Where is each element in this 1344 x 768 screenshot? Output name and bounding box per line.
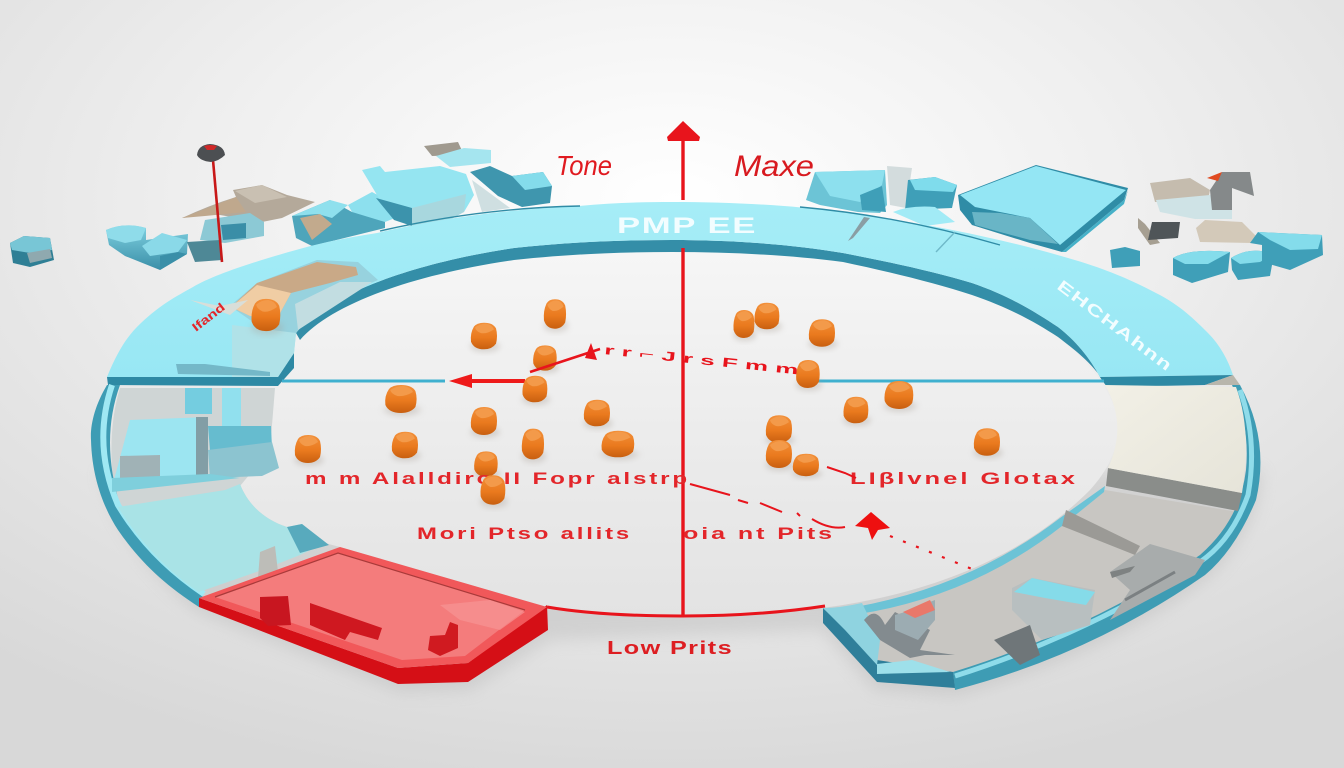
pin marker — [197, 144, 225, 262]
grey machine — [1138, 172, 1254, 245]
teal machine: centre-left — [292, 192, 410, 246]
red arrow pointing left — [449, 374, 525, 388]
panel inner inset — [215, 553, 525, 660]
interior grey — [111, 388, 275, 510]
vertical red axis with arrow — [667, 121, 700, 616]
label: bottom: Low Prits — [607, 638, 733, 658]
small dark block — [1148, 222, 1180, 240]
inner floor — [240, 252, 1118, 616]
label: Maxe: Maxe — [734, 150, 814, 183]
machine: left grey — [864, 612, 955, 658]
tan stone — [1196, 220, 1256, 243]
grey floor — [823, 490, 1238, 672]
red bottom line — [547, 606, 825, 616]
ring shadow — [100, 470, 1262, 696]
block: teal cube — [905, 177, 957, 210]
panel top surface — [199, 547, 547, 668]
red block right — [428, 622, 458, 656]
orange items — [251, 299, 1003, 479]
left lower ring — [91, 385, 329, 607]
step block — [287, 524, 329, 553]
outer rim — [91, 385, 204, 607]
blue horizontal axis right — [818, 380, 1104, 382]
band top rim — [380, 206, 1000, 245]
band front edge right — [1100, 375, 1233, 387]
cream panel: side — [1106, 468, 1242, 511]
corner foot — [823, 608, 955, 688]
block: large teal slab — [958, 165, 1128, 252]
red block left — [260, 596, 291, 626]
top ring band — [107, 202, 1240, 387]
teal strip above band — [893, 207, 955, 226]
red panel — [199, 547, 548, 684]
label: Tone: Tone — [556, 150, 612, 181]
cream panel: top — [1105, 385, 1246, 493]
band front edge left — [107, 353, 294, 386]
panel side wall — [199, 598, 548, 684]
band cut marks — [848, 217, 870, 241]
tan machine — [182, 185, 315, 222]
band side wall — [296, 240, 1107, 387]
block: teal left — [806, 166, 912, 213]
embedded tan module on band — [176, 260, 378, 377]
block: teal pair — [106, 225, 188, 270]
small teal cube — [1110, 247, 1140, 268]
dashed trend line upper — [690, 484, 845, 528]
block: far left cube — [10, 236, 54, 267]
small connector near right label — [827, 467, 856, 478]
outer rim wall — [953, 385, 1260, 690]
orange item over label — [480, 475, 508, 508]
label: right centre: LIβlvnel Glotax — [850, 469, 1078, 488]
inner teal rim — [823, 486, 1105, 618]
teal machine: large top — [362, 142, 491, 226]
building: tower — [185, 388, 212, 414]
label: lower left: Mori Ptso allits — [417, 524, 632, 543]
band top surface — [107, 202, 1233, 377]
band curved label: EHCHAhnn — [1054, 278, 1176, 375]
top-left scattered blocks — [10, 142, 552, 270]
red panel highlight — [440, 600, 525, 630]
label: left centre: m m Alalldiro II Fopr alstrp — [305, 469, 690, 488]
machine: centre teal block — [1012, 578, 1095, 640]
red block centre — [310, 603, 382, 640]
teal lower panel — [118, 484, 325, 592]
red diagonal arrow — [530, 343, 600, 372]
dashed trend line lower — [890, 536, 972, 569]
top-right scattered blocks — [806, 165, 1323, 283]
teal tank — [187, 213, 264, 262]
upper dashed label: r r ⌐ J r s F m m — [604, 342, 799, 377]
grey upright — [258, 546, 278, 578]
red arrow up — [855, 512, 890, 540]
building: main block — [114, 417, 208, 480]
teal cluster — [1173, 232, 1323, 283]
band title: PMP EE — [617, 213, 757, 238]
step edge — [1062, 510, 1140, 555]
teal machine: right of top-left group — [470, 166, 552, 212]
label: lower right: oia nt Pits — [683, 524, 835, 543]
machine: right rail — [1110, 544, 1205, 620]
blue horizontal axis left — [282, 380, 445, 382]
red scribble on band: Ifand — [189, 300, 228, 334]
right lower ring — [823, 385, 1260, 690]
